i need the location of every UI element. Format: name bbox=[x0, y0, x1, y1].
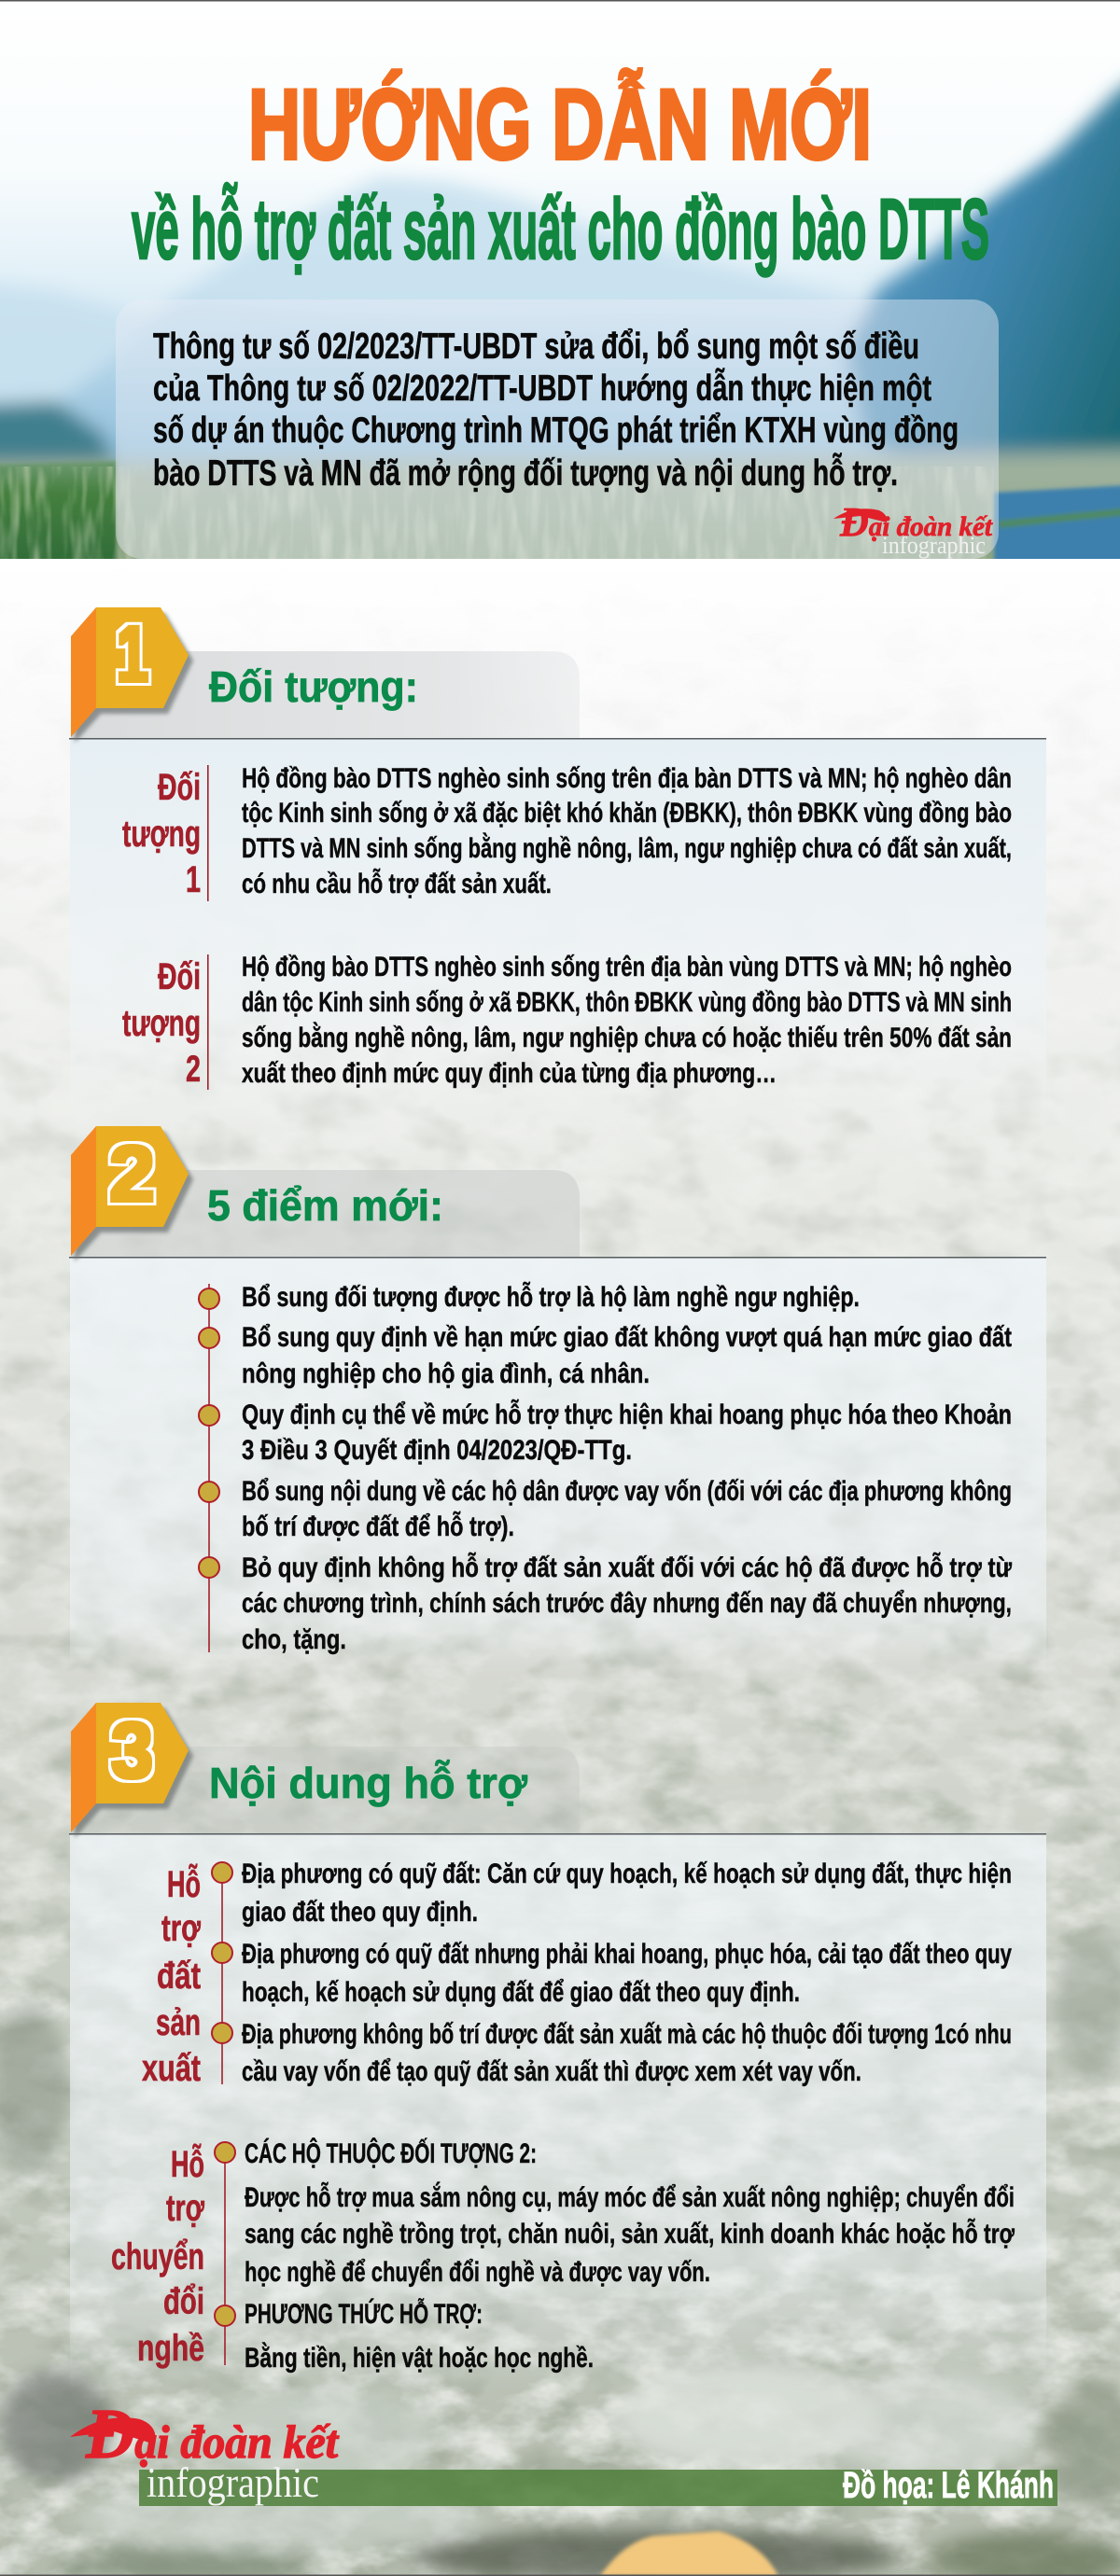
label: đối tượng 1: Đối bbox=[158, 767, 201, 808]
label: hỗ trợ đất sản xuất bbox=[142, 1862, 201, 2089]
badge 3 bbox=[71, 1703, 193, 1838]
text: đối tượng 1: có nhu cầu hỗ trợ đất sản xuất. bbox=[242, 868, 552, 899]
career support text: CÁC HỘ THUỘC ĐỐI TƯỢNG 2: bbox=[245, 2137, 537, 2169]
heading 3: Nội dung hỗ trợ bbox=[209, 1759, 527, 1807]
label: hỗ trợ đất sản xuất: Hỗ bbox=[167, 1862, 201, 1905]
text: đối tượng 2: xuất theo định mức quy định của từng địa phương… bbox=[242, 1058, 777, 1089]
label: đối tượng 2: Đối bbox=[158, 956, 201, 997]
title: HƯỚNG DẪN MỚI bbox=[248, 68, 872, 180]
label: hỗ trợ chuyển đổi nghề: Hỗ bbox=[171, 2142, 204, 2185]
label: hỗ trợ đất sản xuất: sản bbox=[156, 2002, 201, 2043]
bullet markers bbox=[215, 2142, 235, 2326]
intro text bbox=[153, 327, 959, 494]
header rule bbox=[69, 1833, 1046, 1834]
section 3 content panel bbox=[70, 1834, 1046, 2394]
section 3 header bbox=[69, 1703, 1046, 1838]
land support text bbox=[242, 1859, 1012, 2087]
point 2 bbox=[242, 1322, 1012, 1389]
header tab bbox=[71, 1170, 580, 1258]
footer bar bbox=[139, 2470, 1057, 2506]
pumpkin flower bbox=[600, 2531, 778, 2576]
hero landscape photo bbox=[0, 69, 1120, 559]
text: đối tượng 2 bbox=[242, 952, 1012, 1089]
group: đối tượng 1 bbox=[122, 763, 1012, 901]
heading 2: 5 điểm mới: bbox=[207, 1181, 443, 1230]
label: đối tượng 1 bbox=[122, 767, 201, 900]
section 2 header bbox=[69, 1126, 1046, 1261]
header rule bbox=[69, 738, 1046, 739]
bullet markers bbox=[199, 1288, 219, 1578]
point 5 bbox=[242, 1552, 1012, 1655]
section 1 header bbox=[69, 607, 1046, 743]
badge 2: 2 bbox=[109, 1130, 155, 1218]
land support text: hoạch, kế hoạch sử dụng đất để giao đất theo quy định. bbox=[242, 1977, 800, 2008]
header rule bbox=[69, 1257, 1046, 1258]
group: hỗ trợ chuyển đổi nghề bbox=[111, 2137, 1015, 2374]
label: đối tượng 1: tượng bbox=[122, 814, 201, 855]
label: hỗ trợ chuyển đổi nghề: nghề bbox=[137, 2328, 204, 2369]
point 5: cho, tặng. bbox=[242, 1624, 346, 1655]
label: đối tượng 2 bbox=[122, 956, 201, 1090]
land support text: cầu vay vốn để tạo quỹ đất sản xuất thì được xem xét vay vốn. bbox=[242, 2056, 861, 2087]
career support text: học nghề để chuyển đổi nghề và được vay vốn. bbox=[245, 2257, 710, 2288]
footer logo: Đại đoàn kết bbox=[85, 2395, 340, 2473]
header tab bbox=[71, 651, 580, 739]
section 2 content panel bbox=[70, 1258, 1046, 1673]
label: hỗ trợ chuyển đổi nghề bbox=[111, 2142, 204, 2369]
footer infographic wordmark: infographic bbox=[147, 2459, 319, 2506]
hero logo: Đại đoàn kết bbox=[839, 499, 994, 545]
label: hỗ trợ chuyển đổi nghề: trợ bbox=[166, 2188, 204, 2229]
text: đối tượng 1 bbox=[242, 763, 1012, 899]
career support text bbox=[245, 2137, 1015, 2374]
point 4: bố trí được đất để hỗ trợ). bbox=[242, 1511, 514, 1542]
hero logo: infographic bbox=[882, 532, 986, 559]
land support text: giao đất theo quy định. bbox=[242, 1897, 478, 1928]
career support text: Bằng tiền, hiện vật hoặc học nghề. bbox=[245, 2342, 594, 2374]
label: hỗ trợ chuyển đổi nghề: chuyển bbox=[111, 2236, 204, 2277]
badge 2 bbox=[71, 1126, 193, 1261]
label: hỗ trợ đất sản xuất: đất bbox=[157, 1956, 201, 1997]
label: đối tượng 2: tượng bbox=[122, 1003, 201, 1044]
group: đối tượng 2 bbox=[122, 952, 1012, 1090]
point 1: Bổ sung đối tượng được hỗ trợ là hộ làm nghề ngư nghiệp. bbox=[242, 1281, 860, 1313]
point 3: 3 Điều 3 Quyết định 04/2023/QĐ-TTg. bbox=[242, 1435, 632, 1466]
label: hỗ trợ đất sản xuất: trợ bbox=[161, 1908, 201, 1949]
label: đối tượng 2: 2 bbox=[186, 1049, 201, 1090]
career support text: PHƯƠNG THỨC HỖ TRỢ: bbox=[245, 2298, 483, 2330]
point 2: nông nghiệp cho hộ gia đình, cá nhân. bbox=[242, 1358, 650, 1389]
group: hỗ trợ đất sản xuất bbox=[142, 1859, 1012, 2089]
label: hỗ trợ đất sản xuất: xuất bbox=[142, 2048, 201, 2089]
heading 1: Đối tượng: bbox=[209, 662, 418, 711]
point 3 bbox=[242, 1399, 1012, 1466]
title bbox=[132, 68, 989, 277]
intro translucent panel bbox=[116, 299, 999, 559]
badge 1 bbox=[71, 607, 193, 743]
badge 3: 3 bbox=[111, 1706, 153, 1794]
list: 5 điểm mới bbox=[199, 1281, 1012, 1655]
bullet markers bbox=[212, 1862, 232, 2043]
badge 1: 1 bbox=[117, 610, 148, 698]
lower background: leaves photo bbox=[0, 559, 1120, 2576]
label: hỗ trợ chuyển đổi nghề: đổi bbox=[163, 2281, 204, 2322]
point 4 bbox=[242, 1476, 1012, 1542]
section 1 content panel bbox=[70, 739, 1046, 1131]
label: đối tượng 1: 1 bbox=[186, 859, 201, 900]
header tab bbox=[71, 1747, 580, 1834]
